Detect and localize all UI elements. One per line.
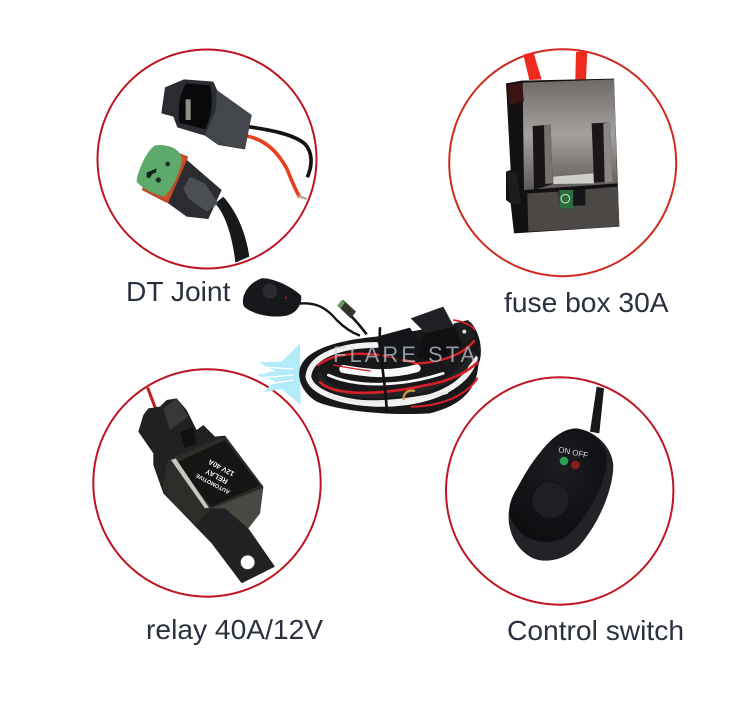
photo: fuse box bbox=[506, 51, 619, 233]
panel: control switch bbox=[446, 377, 673, 605]
circle outline: relay bbox=[93, 369, 321, 597]
watermark star logo bbox=[256, 343, 301, 405]
relay in harness bbox=[377, 328, 427, 360]
DT plug cable bbox=[352, 317, 367, 334]
label: fuse box 30A: fuse box 30A bbox=[504, 286, 669, 318]
gold ring terminal bbox=[404, 391, 415, 400]
photo: control switch: ON OFF bbox=[557, 445, 589, 460]
panel: DT joint bbox=[98, 50, 316, 268]
small switch bbox=[243, 278, 301, 317]
relay print: RELAY bbox=[204, 467, 229, 486]
photo: DT connectors bbox=[137, 79, 311, 263]
switch cable bbox=[298, 303, 360, 336]
panel: fuse box bbox=[449, 49, 676, 276]
label: relay 40A/12V: relay 40A/12V bbox=[146, 613, 323, 645]
circle outline: fuse box bbox=[449, 49, 676, 276]
wire bundle mass bbox=[299, 322, 481, 414]
relay print: AUTOMOTIVE bbox=[195, 471, 231, 495]
label: DT Joint: DT Joint bbox=[126, 275, 231, 307]
photo: control switch bbox=[509, 387, 613, 561]
circle outline: DT joint bbox=[98, 50, 316, 268]
relay print: 12V 40A bbox=[206, 457, 236, 479]
photo: relay bbox=[138, 388, 275, 583]
panel: wiring harness bbox=[243, 278, 481, 414]
relay print bbox=[195, 455, 240, 495]
wire loops bbox=[308, 328, 477, 412]
circle outline: control switch bbox=[446, 377, 673, 605]
harness photo bbox=[243, 278, 481, 414]
watermark text: FLARE STA bbox=[333, 342, 478, 367]
label: Control switch: Control switch bbox=[507, 614, 684, 646]
panel: relay bbox=[93, 369, 321, 597]
